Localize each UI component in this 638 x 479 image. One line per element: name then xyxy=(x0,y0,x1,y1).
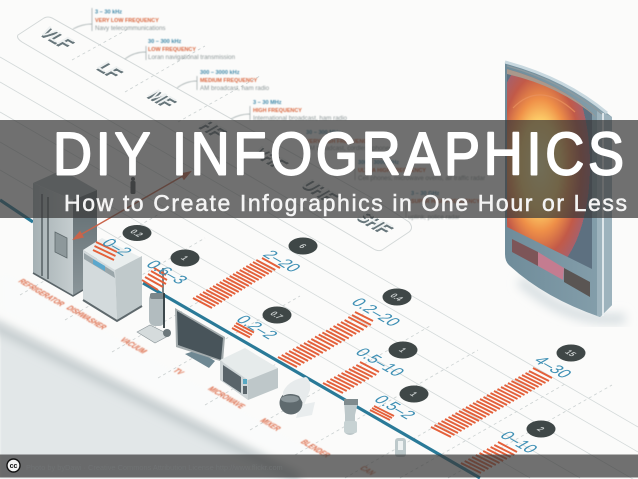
subtitle: How to Create Infographics in One Hour or Less xyxy=(64,190,627,216)
distance arrow xyxy=(74,172,190,239)
frequency callouts: Cell phones, microwave ovens, air traffic radar xyxy=(358,175,485,182)
appliance labels: REFRIGERATOR xyxy=(16,278,68,308)
range labels: 0.6–3 xyxy=(141,258,192,287)
person silhouette xyxy=(130,177,136,194)
bar 4-30 xyxy=(431,368,552,437)
frequency callouts: 30 – 300 MHz xyxy=(306,130,341,136)
band labels: HF xyxy=(194,119,231,141)
band labels: UHF xyxy=(296,178,343,205)
frequency callouts: uplink, police radar xyxy=(408,214,460,221)
cc icon: cc xyxy=(10,463,17,470)
title: DIY INFOGRAPHICS xyxy=(53,121,624,188)
frequency callouts: Loran navigational transmission xyxy=(148,54,236,61)
frequency callouts: 3 – 30 MHz xyxy=(253,100,282,106)
band labels: LF xyxy=(92,60,128,81)
frequency callouts: HIGH FREQUENCY xyxy=(253,108,302,114)
band labels: HF xyxy=(194,117,231,139)
frequency callouts: FM broadcast, cordless phones xyxy=(306,145,392,152)
range labels: 0–2 xyxy=(97,236,136,259)
frequency callouts: 30 – 300 kHz xyxy=(148,39,181,45)
band labels xyxy=(34,24,398,237)
appliance labels: VACUUM xyxy=(117,336,150,355)
frequency callouts: MEDIUM FREQUENCY xyxy=(200,78,258,84)
range labels: 0.2–20 xyxy=(347,296,404,329)
bar 0.2-20 xyxy=(278,312,373,367)
band labels: VHF xyxy=(247,143,293,170)
appliance labels xyxy=(16,278,378,477)
badge values: 0.7 xyxy=(268,310,286,320)
badge values: 0.4 xyxy=(388,292,406,302)
band labels: UHF xyxy=(296,176,343,203)
band labels: LF xyxy=(92,58,128,79)
range labels: 0.5–2 xyxy=(369,393,420,422)
badge values xyxy=(128,228,579,433)
bar 0.5-2 xyxy=(370,406,394,420)
appliance labels: DISHWASHER xyxy=(64,304,110,331)
badge values: 1 xyxy=(178,254,192,262)
frequency callouts: SUPER HIGH FREQUENCY xyxy=(411,199,480,205)
band labels: SHF xyxy=(352,208,398,235)
badge values: 2 xyxy=(534,425,548,433)
appliance labels: MIXER xyxy=(257,417,284,432)
frequency callouts: 3 – 30 kHz xyxy=(95,10,122,16)
frequency callouts: 300 – 3000 MHz xyxy=(358,160,399,166)
frequency callouts: VERY HIGH FREQUENCY xyxy=(306,139,371,145)
band labels: VHF xyxy=(247,145,293,172)
badge values: 15 xyxy=(563,348,579,358)
range labels: 2–20 xyxy=(258,248,305,275)
TV xyxy=(175,308,225,368)
bar 2-20 xyxy=(193,258,280,308)
band labels: VLF xyxy=(34,24,79,50)
bar 0-10 xyxy=(461,442,517,473)
footer band xyxy=(0,454,638,478)
cc icon xyxy=(7,459,20,472)
power badges xyxy=(122,225,586,438)
frequency callouts: AM broadcast, ham radio xyxy=(200,85,270,92)
orange bars xyxy=(93,242,552,473)
blue axis line xyxy=(0,200,480,478)
dishwasher xyxy=(83,238,142,321)
badge values: 1 xyxy=(407,390,421,398)
frequency callouts: LOW FREQUENCY xyxy=(148,47,196,53)
frequency callouts: VERY LOW FREQUENCY xyxy=(95,18,159,24)
bar 0-2 xyxy=(93,242,117,260)
frequency callouts: 3 – 30 GHz xyxy=(411,191,439,197)
bar 0.2-2 xyxy=(232,323,254,338)
floor shadow xyxy=(0,270,340,478)
badge values: 0.2 xyxy=(128,228,146,238)
range labels: 0.5–10 xyxy=(351,346,408,379)
band labels: VLF xyxy=(34,26,79,52)
blender xyxy=(344,399,358,435)
frequency callouts: Navy telecommunications xyxy=(95,25,166,32)
range labels xyxy=(97,236,576,456)
frequency callouts: 300 – 3000 kHz xyxy=(200,70,240,76)
can opener xyxy=(395,438,406,457)
refrigerator xyxy=(33,170,97,296)
vacuum xyxy=(137,268,171,343)
band labels: MF xyxy=(142,87,181,109)
frequency callouts: ULTRA HIGH FREQUENCY xyxy=(358,168,426,174)
appliance labels: TV xyxy=(171,367,187,377)
range labels: 4–30 xyxy=(529,354,576,381)
range labels: 0.2–2 xyxy=(231,313,282,342)
bar 0.5-10 xyxy=(323,362,379,393)
microwave xyxy=(220,348,278,400)
appliance labels: MICROWAVE xyxy=(205,385,248,410)
tablet device xyxy=(505,62,625,319)
band labels: SHF xyxy=(352,210,398,237)
band labels: MF xyxy=(142,89,181,111)
appliance labels: CAN xyxy=(357,465,378,477)
frequency callouts xyxy=(73,8,485,221)
badge values: 1 xyxy=(396,346,410,354)
frequency band outline xyxy=(18,17,412,251)
range labels: 0–10 xyxy=(495,429,542,456)
mixer xyxy=(280,377,315,418)
photo credit: Photo by byDawi · Creative Commons Attribution License http://www.flickr.com xyxy=(26,463,283,472)
frequency callouts: International broadcast, ham radio xyxy=(253,115,347,122)
bar 0.6-3 xyxy=(142,268,167,290)
badge values: 6 xyxy=(296,242,310,250)
appliance labels: BLENDER xyxy=(298,438,333,459)
title band xyxy=(0,120,638,218)
